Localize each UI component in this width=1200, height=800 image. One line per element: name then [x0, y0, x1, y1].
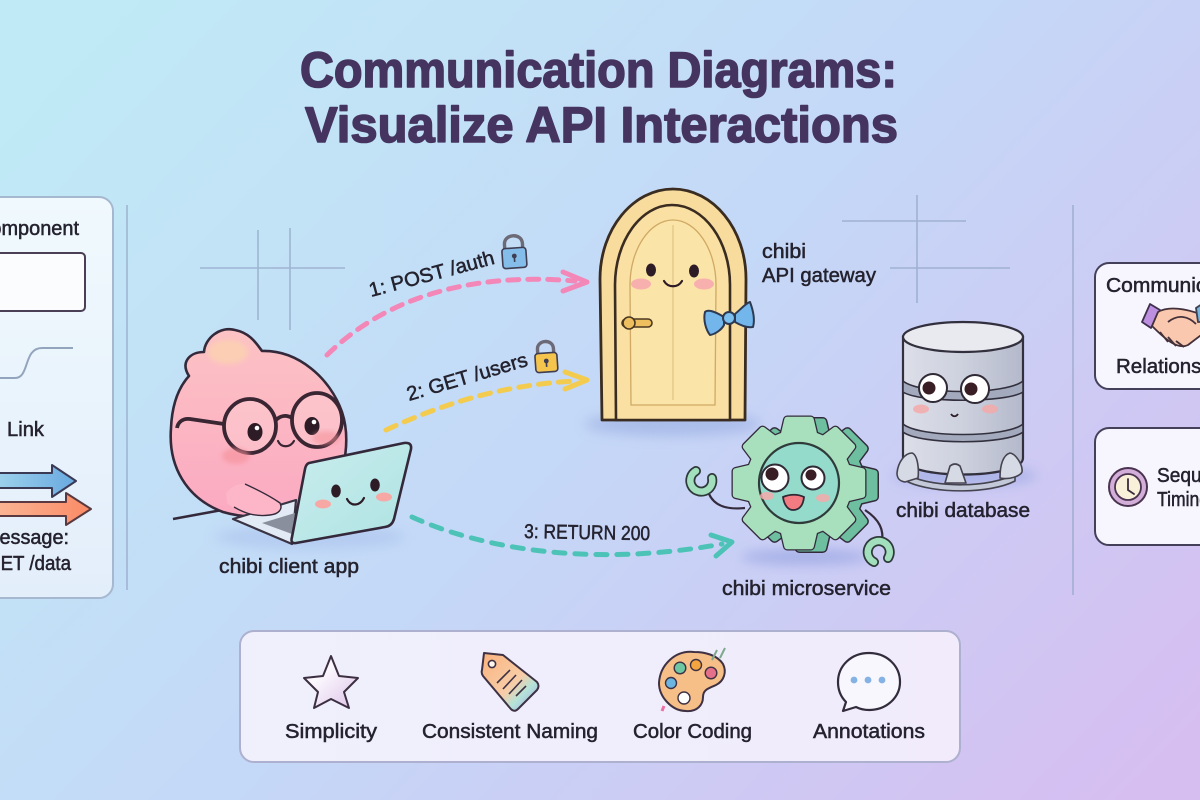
arrow 3: RETURN 200 — [412, 517, 732, 556]
icon: palette — [659, 648, 725, 711]
database feet — [897, 453, 1022, 491]
eyes — [248, 417, 320, 441]
label: 2: GET /users: 2: GET /users — [404, 349, 530, 406]
icon: clock — [1109, 468, 1147, 506]
text: simplicity: Simplicity — [285, 721, 377, 743]
label: chibi API gateway: chibi — [762, 241, 806, 263]
gear front — [736, 420, 862, 546]
laptop screen — [292, 443, 411, 543]
database face — [913, 374, 998, 416]
door leaf — [615, 205, 730, 420]
door face — [631, 264, 714, 290]
icon: star — [304, 656, 358, 708]
label: 1: POST /auth: 1: POST /auth — [367, 247, 497, 302]
title — [300, 42, 898, 153]
icon: speech bubble — [838, 653, 900, 711]
legend: blue arrow — [0, 465, 76, 497]
cylinder top — [903, 322, 1023, 352]
character: chibi client app — [171, 329, 411, 549]
character: chibi microservice — [690, 420, 890, 565]
text: annotations: Annotations — [813, 721, 925, 743]
wrench hands — [690, 471, 890, 562]
legend: component box — [0, 253, 85, 311]
legend: link label: Link — [7, 419, 45, 441]
legend: message label — [0, 527, 72, 575]
text: color coding: Color Coding — [633, 721, 752, 743]
character: chibi database — [893, 322, 1037, 491]
door handle — [622, 317, 652, 329]
glasses — [177, 393, 342, 453]
hand — [226, 484, 281, 516]
arrow 1: POST /auth — [327, 272, 587, 355]
panel: communication relationships — [1095, 263, 1200, 389]
label: chibi API gateway — [762, 241, 876, 287]
legend: orange arrow — [0, 493, 91, 525]
label: chibi client app: chibi client app — [219, 556, 359, 578]
title: Communication Diagrams: — [300, 42, 897, 98]
door frame — [600, 189, 746, 420]
panel: sequence timing — [1095, 428, 1200, 545]
panel: legend — [0, 197, 113, 598]
text: sequence timing — [1157, 465, 1200, 511]
gear arms — [709, 494, 882, 543]
icon: yellow lock — [534, 341, 558, 373]
panel: best practices — [240, 631, 960, 762]
label: chibi microservice: chibi microservice — [722, 578, 891, 600]
label: 3: RETURN 200: 3: RETURN 200 — [524, 521, 650, 545]
client body — [171, 329, 346, 517]
text: consistent naming: Consistent Naming — [422, 721, 598, 743]
gear side — [748, 422, 874, 548]
label: chibi API gateway: API gateway — [762, 265, 876, 287]
character: chibi API gateway — [585, 189, 761, 436]
cylinder body — [903, 337, 1023, 474]
title: Visualize API Interactions — [305, 97, 898, 153]
door panel — [630, 220, 716, 405]
gear face — [759, 443, 839, 523]
bow tie — [704, 302, 754, 335]
cylinder bands — [903, 381, 1023, 400]
legend: link curve — [0, 348, 73, 378]
icon: handshake — [1142, 302, 1200, 347]
icon: blue lock — [501, 235, 527, 269]
arrow 2: GET /users — [386, 372, 587, 430]
laptop base — [233, 500, 296, 544]
label: chibi database: chibi database — [896, 500, 1030, 522]
icon: tag — [482, 653, 538, 711]
